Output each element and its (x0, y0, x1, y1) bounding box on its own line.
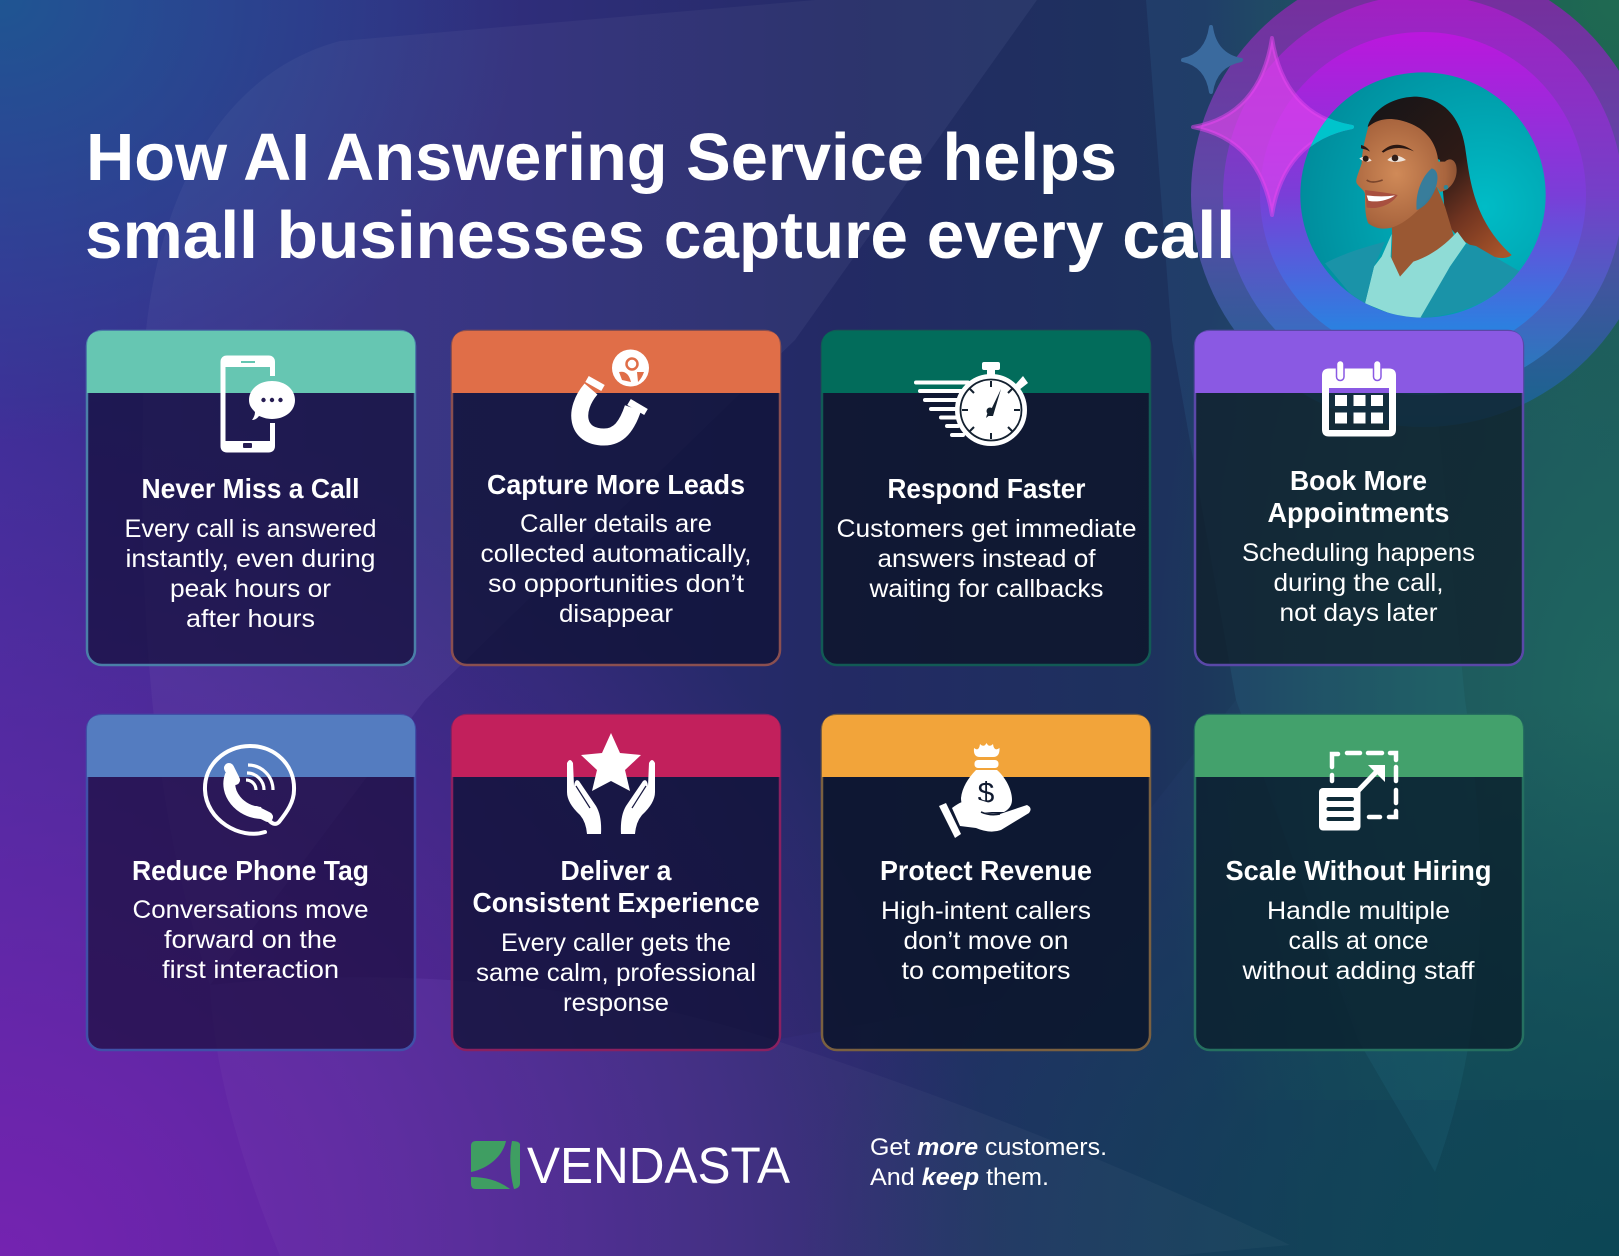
body text: collected automatically, (480, 540, 752, 568)
body text: to competitors (902, 957, 1070, 985)
heading: Appointments (1268, 497, 1450, 528)
icon: phone with chat bubble (222, 357, 295, 451)
heading: Deliver a (560, 855, 672, 886)
card header (822, 715, 1150, 777)
tagline: Get more customers. (870, 1134, 1107, 1161)
card header (87, 331, 415, 393)
body text: Handle multiple (1267, 897, 1450, 925)
card: Respond Faster (822, 331, 1150, 665)
body text: High-intent callers (881, 897, 1091, 925)
body text (476, 929, 756, 1017)
body text: Scheduling happens (1242, 539, 1475, 567)
heading (472, 855, 760, 918)
icon: phone in a circle (205, 746, 294, 834)
card: Never Miss a Call (87, 331, 415, 665)
body text: not days later (1280, 599, 1438, 627)
logo mark (471, 1141, 520, 1189)
card header (452, 715, 780, 777)
icon: hands holding a star (567, 733, 655, 834)
body text: after hours (186, 605, 315, 633)
card header (452, 331, 780, 393)
body text: during the call, (1274, 569, 1444, 597)
title: How AI Answering Service helps (86, 120, 1117, 195)
card: Deliver a Consistent Experience (452, 715, 780, 1050)
body text: disappear (559, 600, 673, 628)
body text: without adding staff (1241, 957, 1475, 985)
body text (836, 515, 1136, 603)
heading: Scale Without Hiring (1226, 855, 1492, 886)
icon: calendar (1322, 360, 1396, 436)
body text (132, 896, 368, 984)
heading (1268, 465, 1450, 528)
body text: first interaction (162, 956, 339, 984)
icon: large sparkle (1193, 38, 1352, 215)
portrait photo (1300, 72, 1546, 322)
heading: Protect Revenue (880, 855, 1092, 886)
concentric rings behind portrait (1191, 0, 1619, 427)
card: Book More Appointments (1195, 331, 1523, 665)
body text: waiting for callbacks (868, 575, 1104, 603)
heading: Book More (1290, 465, 1427, 496)
body text (1241, 897, 1475, 985)
body text: Every caller gets the (501, 929, 731, 957)
card: Scale Without Hiring (1195, 715, 1523, 1050)
card header (1195, 331, 1523, 393)
tagline: And keep them. (870, 1164, 1049, 1191)
body text: so opportunities don’t (488, 570, 744, 598)
body text: Caller details are (520, 510, 712, 538)
body text: calls at once (1288, 927, 1428, 955)
heading: Reduce Phone Tag (132, 855, 369, 886)
heading: Capture More Leads (487, 469, 745, 500)
icon: hand holding money bag (939, 743, 1031, 838)
body text: Conversations move (132, 896, 368, 924)
body text (881, 897, 1091, 985)
heading: Respond Faster (888, 473, 1086, 504)
card: Reduce Phone Tag (87, 715, 415, 1050)
body text: instantly, even during (126, 545, 376, 573)
heading: Never Miss a Call (142, 473, 360, 504)
card header (87, 715, 415, 777)
card header (822, 331, 1150, 393)
title (85, 120, 1235, 273)
body text: don’t move on (904, 927, 1068, 955)
body text: peak hours or (170, 575, 331, 603)
card: Capture More Leads (452, 331, 780, 665)
body text (1242, 539, 1475, 627)
card header (1195, 715, 1523, 777)
icon: document scaling up (1319, 753, 1396, 830)
heading: Consistent Experience (472, 887, 760, 918)
icon: stopwatch with speed lines (916, 362, 1028, 445)
body text: response (563, 989, 669, 1017)
body text: same calm, professional (476, 959, 756, 987)
icon: hand holding money bag: $ (978, 777, 995, 810)
logo wordmark: VENDASTA (527, 1137, 790, 1194)
tagline (870, 1134, 1107, 1191)
body text: forward on the (164, 926, 337, 954)
logo: Vendasta (471, 1137, 790, 1194)
title: small businesses capture every call (85, 198, 1235, 273)
body text (480, 510, 752, 628)
body text (124, 515, 376, 633)
card: Protect Revenue (822, 715, 1150, 1050)
body text: Customers get immediate (836, 515, 1136, 543)
icon: small sparkle (1183, 27, 1241, 92)
icon: magnet attracting a person (580, 350, 649, 437)
body text: Every call is answered (124, 515, 376, 543)
body text: answers instead of (878, 545, 1096, 573)
